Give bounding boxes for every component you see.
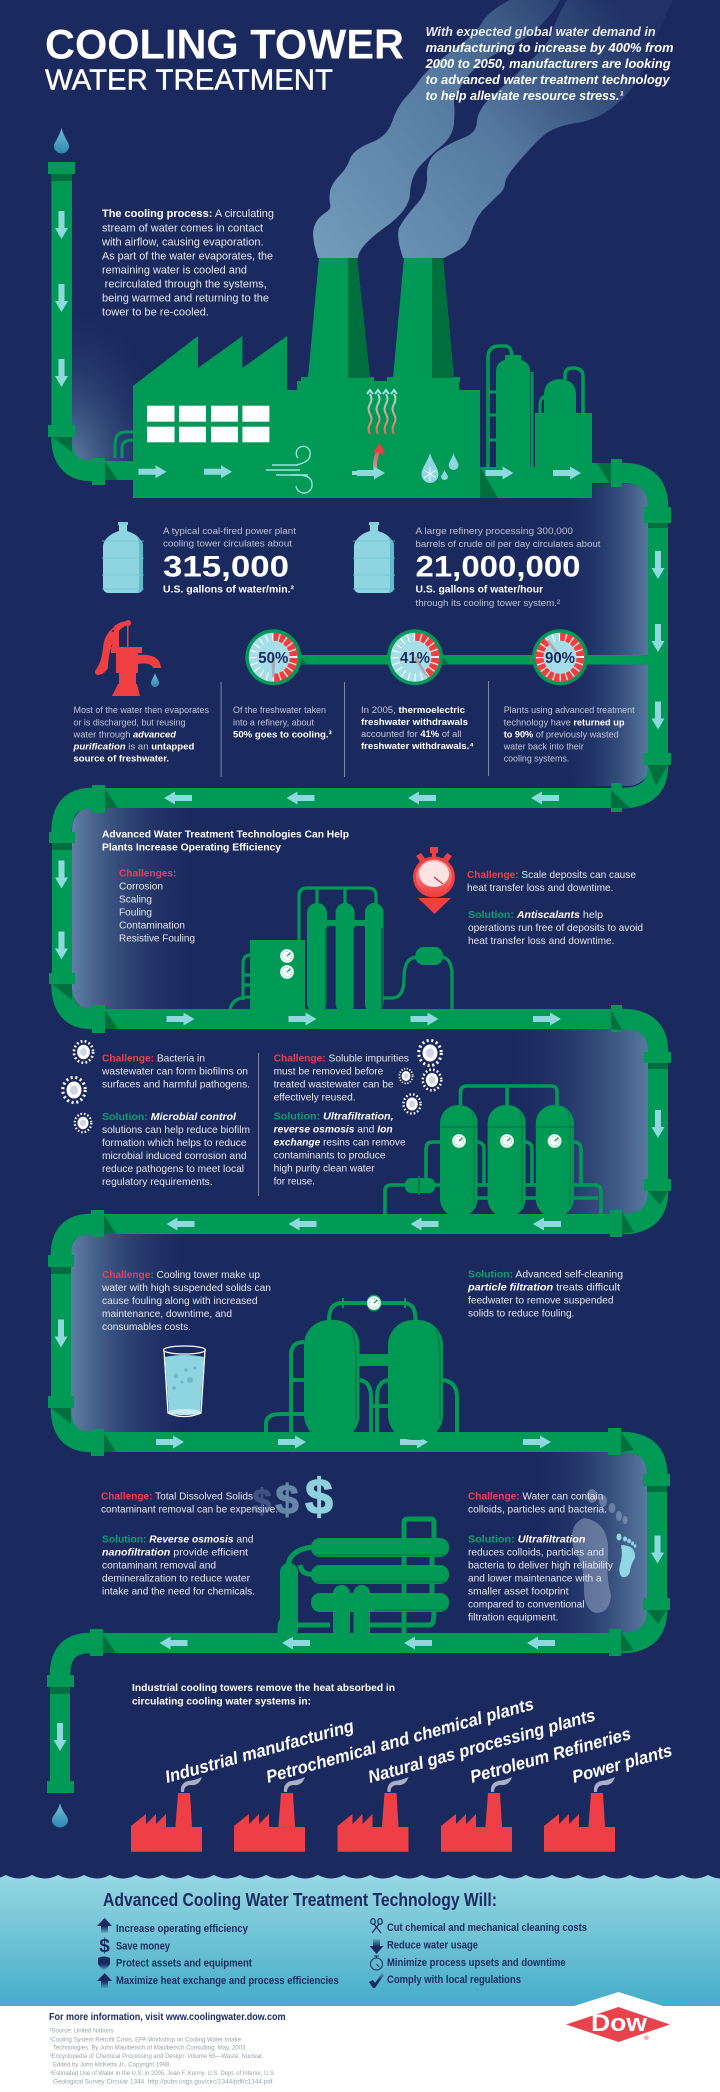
TDS text: Challenge: Total Dissolved Solids [101, 1491, 253, 1502]
benefits right list: Minimize process upsets and downtime [387, 1957, 566, 1969]
challenges list: Corrosion [119, 882, 163, 893]
particle filtration text: Solution: Advanced self-cleaning [468, 1269, 623, 1280]
column text: reuse: water through advanced [72, 729, 176, 739]
column text: 41%: In 2005, thermoelectric [361, 705, 465, 715]
footnotes: Technologies. By John Maulbetsch of Maulbetsch Consulting. May, 2003. [53, 2044, 247, 2051]
fact: 21,000,000: through its cooling tower system.² [416, 598, 561, 609]
factory windows [147, 406, 269, 442]
wave edge [0, 1870, 720, 1878]
icon: red up arrow [352, 443, 385, 480]
footnotes [50, 2028, 276, 2085]
benefits left list: Save money [116, 1940, 170, 1952]
particle filtration text: feedwater to remove suspended [468, 1295, 614, 1306]
benefits left list: Increase operating efficiency [116, 1923, 248, 1935]
benefits left list [116, 1923, 339, 1987]
rotated industry labels: Industrial manufacturing [163, 1715, 356, 1787]
microbial control text: formation which helps to reduce [102, 1138, 247, 1149]
bottom water drop [52, 1803, 68, 1828]
intro text: 2000 to 2050, manufacturers are looking [425, 56, 671, 71]
ultrafiltration text [274, 1053, 409, 1187]
fact: 21,000,000 [416, 526, 601, 609]
pipe system [47, 162, 671, 1793]
gauge 41%: 41% [400, 650, 430, 667]
TDS text: intake and the need for chemicals. [102, 1587, 255, 1598]
divider 1 [221, 682, 222, 777]
challenges list: Fouling [119, 908, 152, 919]
challenges list: Resistive Fouling [119, 934, 195, 945]
divider 3 [488, 681, 489, 776]
particle filtration text [467, 1269, 623, 1319]
fact: 21,000,000: 21,000,000 [416, 551, 580, 584]
heading: advanced technologies [102, 830, 349, 854]
red factory icons [131, 1777, 615, 1852]
icon: small footprint [616, 1534, 636, 1577]
column text: 90%: water back into their [503, 741, 584, 751]
ultrafiltration footprint text: Challenge: Water can contain [468, 1491, 604, 1502]
divider [258, 1053, 259, 1196]
title: WATER TREATMENT [45, 64, 333, 96]
column text: 90% [503, 705, 635, 763]
cooling tower make up text: maintenance, downtime, and [102, 1309, 232, 1320]
bacteria icons [63, 1040, 441, 1132]
benefits left list: Maximize heat exchange and process efficiencies [116, 1975, 339, 1987]
benefits right list: Cut chemical and mechanical cleaning costs [387, 1922, 587, 1934]
heading: advanced technologies: Plants Increase Operating Efficiency [102, 843, 281, 854]
microbial control text: Challenge: Bacteria in [102, 1053, 205, 1064]
footnotes: Edited by John McKetta Jr., Copyright 1998. [53, 2061, 171, 2068]
heading: advanced technologies: Advanced Water Treatment Technologies Can Help [102, 830, 349, 841]
fact: 315,000: A typical coal-fired power plant [163, 526, 296, 537]
icon: water drops [422, 453, 458, 483]
ultrafiltration footprint text: and lower maintenance with a [468, 1574, 602, 1585]
TDS text [101, 1491, 278, 1598]
icon: large footprint [572, 1489, 628, 1613]
fact: 21,000,000: U.S. gallons of water/hour [416, 585, 543, 596]
Dow logo: ® [644, 2035, 649, 2042]
TDS text: nanofiltration provide efficient [102, 1548, 248, 1559]
microbial control text: microbial induced corrosion and [102, 1151, 247, 1162]
refinery towers [488, 346, 583, 480]
equipment: reverse osmosis skid [280, 1519, 449, 1640]
rotated industry labels: Power plants [570, 1740, 675, 1787]
icon: water bottle left [102, 522, 144, 593]
title: COOLING TOWER [45, 20, 404, 67]
divider 2 [344, 682, 345, 777]
process text: stream of water comes in contact [102, 222, 263, 234]
gauge 41% [387, 629, 443, 685]
footer white area [0, 2006, 720, 2092]
process text: As part of the water evaporates, the [102, 250, 273, 262]
microbial control text: surfaces and harmful pathogens. [102, 1079, 250, 1090]
intro text: to advanced water treatment technology [426, 72, 670, 87]
benefits right list [387, 1922, 587, 1986]
scale text: operations run free of deposits to avoid [468, 923, 643, 934]
small pipes left [115, 432, 133, 458]
gauge 90% [532, 629, 588, 685]
challenges list: Challenges: [119, 869, 176, 880]
ultrafiltration text: reverse osmosis and Ion [274, 1124, 393, 1135]
equipment: particle filters [266, 1294, 457, 1440]
column text: 50%: Of the freshwater taken [233, 705, 326, 715]
ultrafiltration footprint text: Solution: Ultrafiltration [468, 1535, 586, 1546]
gauge 90%: 90% [545, 650, 575, 667]
column text: 90%: to 90% of previously wasted [504, 729, 619, 739]
challenges list [119, 869, 195, 945]
scale text: heat transfer loss and downtime. [467, 883, 614, 894]
scale text: Solution: Antiscalants help [468, 910, 603, 921]
water band [0, 1875, 720, 2006]
icon: red water pump [95, 620, 161, 696]
column text: 41%: freshwater withdrawals [361, 717, 468, 727]
rotated industry labels: Petrochemical and chemical plants [264, 1693, 536, 1787]
icon: dollar signs [253, 1469, 333, 1525]
column text: reuse: purification is an untapped [72, 741, 194, 751]
footnotes: ¹Source: United Nations [50, 2028, 114, 2035]
benefits left list: Protect assets and equipment [116, 1958, 252, 1970]
process text: with airflow, causing evaporation. [101, 236, 264, 248]
ultrafiltration text: effectively reused. [274, 1092, 356, 1103]
microbial control text: reduce pathogens to meet local [102, 1164, 244, 1175]
footnotes: Geological Survey Circular 1344. http://pubs.usgs.gov/circ/1344/pdf/c1344.pdf [53, 2078, 273, 2085]
benefits right list: Comply with local regulations [387, 1974, 521, 1986]
intro text [425, 24, 674, 103]
icon: heat waves [367, 390, 397, 434]
column text: 90%: technology have returned up [504, 717, 625, 727]
ultrafiltration footprint text: colloids, particles and bacteria. [468, 1504, 607, 1515]
ultrafiltration text: exchange resins can remove [274, 1137, 406, 1148]
Dow logo: Dow [591, 2010, 647, 2037]
industries heading [132, 1683, 395, 1707]
column text: 41% [361, 705, 474, 751]
rotated industry labels: Petroleum Refineries [468, 1723, 633, 1787]
scale text: heat transfer loss and downtime. [468, 936, 614, 947]
cooling tower make up text: consumables costs. [102, 1322, 191, 1333]
pump water drop [151, 673, 159, 687]
ultrafiltration text: contaminants to produce [274, 1150, 386, 1161]
fact: 315,000: cooling tower circulates about [163, 539, 292, 550]
fact: 315,000 [163, 526, 296, 596]
microbial control text: regulatory requirements. [102, 1177, 213, 1188]
column text: 90%: Plants using advanced treatment [504, 705, 635, 715]
column text: reuse: Most of the water then evaporates [74, 705, 209, 715]
pipe flow arrows [54, 211, 664, 1751]
process text: The cooling process: A circulating [102, 208, 274, 220]
ultrafiltration text: high purity clean water [274, 1163, 375, 1174]
intro text: to help alleviate resource stress.¹ [426, 88, 624, 103]
cooling tower make up text: cause fouling along with increased [102, 1296, 258, 1307]
ultrafiltration footprint text: reduces colloids, particles and [468, 1548, 604, 1559]
challenges list: Contamination [119, 921, 185, 932]
cooling tower make up text: water with high suspended solids can [101, 1283, 271, 1294]
column text: 90%: cooling systems. [504, 753, 569, 763]
chimney right [387, 258, 460, 382]
column text: 41%: accounted for 41% of all [361, 729, 462, 739]
intro text: With expected global water demand in [426, 24, 656, 39]
column text: reuse [72, 705, 209, 763]
icon: dollar signs: $ [253, 1483, 272, 1521]
top water drop [54, 128, 69, 154]
industries heading: circulating cooling water systems in: [132, 1696, 311, 1707]
microbial control text: Solution: Microbial control [102, 1112, 237, 1123]
TDS text: contaminant removal can be expensive. [101, 1504, 278, 1515]
ultrafiltration footprint text: smaller asset footprint [468, 1587, 569, 1598]
icon: stopwatch [413, 847, 455, 914]
equipment: antiscalant system [230, 888, 452, 1013]
scale text [467, 870, 643, 947]
cooling tower make up text: Challenge: Cooling tower make up [102, 1270, 260, 1281]
factory [115, 258, 592, 498]
fact: 21,000,000: barrels of crude oil per day circulates about [416, 539, 601, 550]
benefits right list: Reduce water usage [387, 1940, 478, 1952]
icon: dollar signs: $ [275, 1476, 299, 1523]
scale text: Challenge: Scale deposits can cause [467, 870, 636, 881]
footnotes: ²Cooling System Retrofit Costs, EPA Workshop on Cooling Water Intake [50, 2036, 241, 2043]
ultrafiltration footprint text: filtration equipment. [468, 1613, 558, 1624]
chimney left [301, 258, 374, 382]
website link: For more information, visit www.coolingwater.dow.com [49, 2011, 286, 2023]
intro text: manufacturing to increase by 400% from [426, 40, 674, 55]
benefits heading: Advanced Cooling Water Treatment Technology Will: [103, 1890, 497, 1910]
particle filtration text: solids to reduce fouling. [468, 1308, 574, 1319]
ultrafiltration footprint text [468, 1491, 614, 1624]
column text: 41%: freshwater withdrawals.⁴ [361, 741, 474, 751]
glow panels [70, 290, 650, 1636]
TDS text: Solution: Reverse osmosis and [102, 1535, 254, 1546]
column text: 50%: into a refinery, about [233, 717, 314, 727]
gauge 50% [245, 629, 301, 685]
gauge connecting pipe [296, 655, 650, 664]
process text [101, 208, 274, 318]
ultrafiltration footprint text: bacteria to deliver high reliability [468, 1561, 614, 1572]
column text: reuse: source of freshwater. [74, 753, 169, 763]
fact: 21,000,000: A large refinery processing 300,000 [416, 526, 573, 537]
microbial control text: wastewater can form biofilms on [101, 1066, 248, 1077]
fact: 315,000: 315,000 [163, 551, 289, 584]
process text: being warmed and returning to the [102, 292, 269, 304]
ultrafiltration text: for reuse. [274, 1176, 315, 1187]
industries heading: Industrial cooling towers remove the heat absorbed in [132, 1683, 395, 1694]
column text: reuse: or is discharged, but reusing [74, 717, 186, 727]
ultrafiltration text: Challenge: Soluble impurities [274, 1053, 409, 1064]
footnotes: ³Encyclopedia of Chemical Processing and Design: Volume 65—Waste: Nuclear. [50, 2053, 264, 2060]
Dow logo [566, 1992, 670, 2042]
icon: wind [266, 446, 312, 493]
benefits right icons [369, 1919, 384, 1988]
TDS text: contaminant removal and [102, 1561, 216, 1572]
smoke plumes [313, 0, 673, 258]
fact: 315,000: U.S. gallons of water/min.² [163, 585, 295, 596]
rotated industry labels [163, 1693, 675, 1787]
icon: water bottle right [353, 522, 395, 593]
benefits left icons [97, 1918, 112, 1988]
column text: 50%: 50% goes to cooling.³ [233, 729, 332, 739]
challenges list: Scaling [119, 895, 152, 906]
process text: recirculated through the systems, [105, 278, 267, 290]
TDS text: demineralization to reduce water [102, 1574, 251, 1585]
cooling tower make up text [101, 1270, 271, 1333]
title [45, 20, 404, 96]
microbial control text [101, 1053, 250, 1188]
ultrafiltration text: treated wastewater can be [274, 1079, 394, 1090]
microbial control text: solutions can help reduce biofilm [102, 1125, 250, 1136]
icon: dollar signs: $ [305, 1469, 333, 1525]
equipment: filtration tanks [385, 1086, 601, 1217]
rotated industry labels: Natural gas processing plants [366, 1705, 598, 1787]
ultrafiltration text: Solution: Ultrafiltration, [274, 1111, 394, 1122]
particle filtration text: particle filtration treats difficult [467, 1282, 620, 1293]
process text: tower to be re-cooled. [102, 306, 209, 318]
ultrafiltration footprint text: compared to conventional [468, 1600, 585, 1611]
benefits left icons: $ [99, 1936, 110, 1957]
process text: remaining water is cooled and [102, 264, 247, 276]
icon: glass of water [164, 1346, 206, 1416]
gauge 50%: 50% [258, 650, 288, 667]
ultrafiltration text: must be removed before [274, 1066, 384, 1077]
column text: 50% [233, 705, 332, 739]
footnotes: ⁴Estimated Use of Water in the U.S. in 2005. Joan F. Kenny. U.S. Dept. of Interior, U.S. [50, 2070, 276, 2077]
